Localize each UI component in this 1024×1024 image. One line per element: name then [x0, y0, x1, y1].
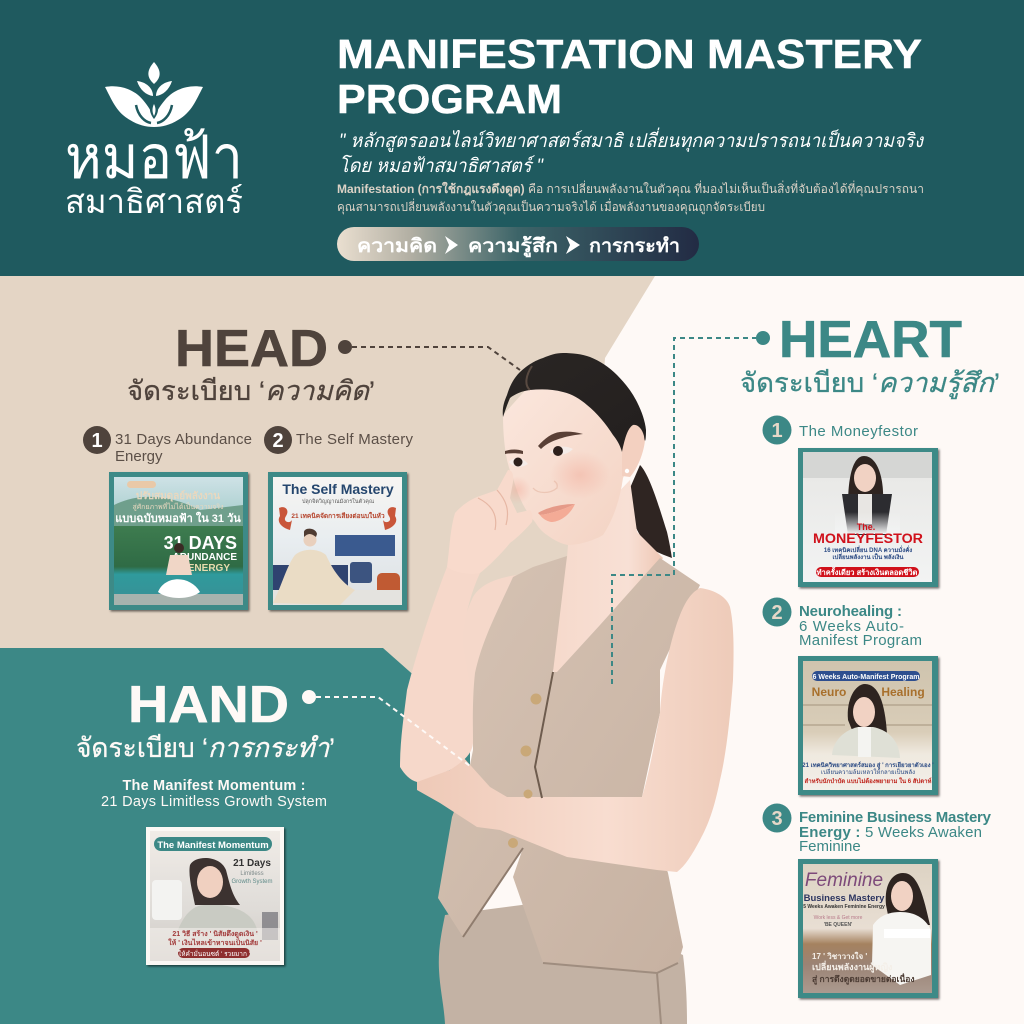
thumbnail: The Moneyfestor: The.	[857, 522, 875, 532]
thumbnail: The Moneyfestor: MONEYFESTOR	[813, 531, 923, 546]
thumbnail: Feminine Business Mastery: 'BE QUEEN'	[824, 922, 852, 928]
subheading: จัดระเบียบ ‘ความรู้สึก’	[740, 368, 1000, 400]
thumbnail: The Manifest Momentum: 21 Days	[233, 858, 271, 869]
item 1 label	[115, 431, 252, 465]
vest flap seam	[463, 848, 523, 937]
item 1 label: 31 Days Abundance	[115, 431, 252, 448]
item 3 label	[799, 809, 992, 855]
hair part	[526, 366, 532, 390]
ear	[622, 425, 645, 477]
item 2 number	[264, 426, 292, 454]
thumbnail: The Moneyfestor: 16 เทคนิคเปลี่ยน DNA ความมั่งคั่ง	[824, 545, 912, 554]
thumbnail: Feminine Business Mastery: 17 ' วิชาวางใจ '	[812, 951, 867, 961]
item 1 label: The Moneyfestor	[799, 423, 918, 440]
eyebrows	[505, 432, 583, 454]
left upper arm	[459, 575, 520, 760]
header band	[0, 0, 1024, 276]
vest placket	[535, 672, 553, 798]
title	[337, 31, 922, 122]
thumbnail: 31 Days Abundance Energy: สู่ศักยภาพที่ไม่ได้เป็นความจริง	[132, 502, 224, 511]
connector: HEAD	[338, 340, 520, 370]
ponytail	[629, 465, 672, 558]
panel: HAND	[76, 676, 470, 965]
item 2 label	[799, 603, 922, 649]
program name: The Manifest Momentum :	[122, 778, 306, 794]
thumbnail: Feminine Business Mastery: Business Mastery	[804, 893, 885, 904]
logo sub wordmark: สมาธิศาสตร์	[65, 183, 243, 220]
item 3 label: Energy : 5 Weeks Awaken	[799, 824, 982, 841]
thumbnail: 31 Days Abundance Energy: ปรับสมดุลย์พลังงาน	[136, 490, 220, 502]
eyes	[509, 446, 573, 467]
thumbnail: Neurohealing: เปลี่ยนความล้มเหลวให้กลายเป็นพลัง	[821, 767, 915, 776]
thumbnail: 31 Days Abundance Energy: ABUNDANCE	[173, 552, 237, 563]
thumbnail: Feminine Business Mastery: 5 Weeks Awaken Feminine Energy	[803, 904, 885, 910]
title: PROGRAM	[337, 76, 562, 122]
thumbnail: The Manifest Momentum: Limitless	[240, 871, 264, 877]
connector: HEART	[612, 331, 770, 685]
buttons	[508, 694, 542, 848]
item 1 label: Energy	[115, 448, 163, 465]
thumbnail: The Manifest Momentum: Growth System	[231, 879, 273, 885]
description: Manifestation (การใช้กฎแรงดึงดูด) คือ การเปลี่ยนพลังงานในตัวคุณ ที่มองไม่เห็นเป็นสิ่งที่จับต้องได้ที่คุณปรารถนา	[337, 180, 924, 197]
program name	[101, 778, 327, 810]
face	[503, 385, 640, 545]
panel: HEAD	[83, 320, 520, 610]
heading: HEAD: HEAD	[175, 320, 328, 378]
title: MANIFESTATION MASTERY	[337, 31, 922, 77]
thumbnail: The Self Mastery: ปลุกจิตวิญญาณมังกรในตัวคุณ	[302, 498, 374, 505]
heading: HAND: HAND	[128, 676, 289, 734]
connector: HAND	[302, 690, 470, 766]
logo: หมอฟ้า สมาธิศาสตร์	[65, 62, 243, 220]
left forearm	[400, 567, 480, 782]
thumbnail: Feminine Business Mastery	[798, 859, 938, 998]
thumbnail: The Manifest Momentum: ให้คำมั่นอนซต์ ' รวยมาก '	[178, 949, 250, 958]
subtitle quote: " หลักสูตรออนไลน์วิทยาศาสตร์สมาธิ เปลี่ยนทุกความปรารถนาเป็นความจริง	[339, 127, 925, 152]
neck and chest	[548, 480, 663, 680]
thumbnail: Neurohealing: 21 เทคนิควิทยาศาสตร์สมอง สู่ ' การเยียวยาตัวเอง '	[802, 761, 934, 770]
thumbnail: Neurohealing: สำหรับนักบำบัด แบบไม่ต้องพยายาม ใน 6 สัปดาห์	[805, 777, 932, 785]
thumbnail: 31 Days Abundance Energy: แบบฉบับหมอฟ้า ใน 31 วัน	[115, 511, 241, 525]
thumbnail: The Manifest Momentum: 21 วิธี สร้าง ' นิสัยดึงดูดเงิน '	[172, 929, 258, 939]
thumbnail: The Moneyfestor	[798, 448, 938, 587]
thumbnail: The Moneyfestor: เปลี่ยนพลังงาน เป็น พลังเงิน	[832, 552, 904, 561]
description: คุณสามารถเปลี่ยนพลังงานในตัวคุณเป็นความจริงได้ เมื่อพลังงานของคุณถูกจัดระเบียบ	[337, 198, 765, 215]
trousers	[439, 900, 687, 1024]
thumbnail: Neurohealing: Neuro	[812, 685, 846, 699]
right arm	[417, 588, 734, 872]
subheading: จัดระเบียบ ‘การกระทำ’	[76, 733, 335, 763]
thumbnail: Feminine Business Mastery: สู่ การดึงดูดยอดขายต่อเนื่อง	[812, 972, 915, 985]
thumbnail: 31 Days Abundance Energy: ENERGY	[188, 563, 230, 574]
thumbnail: The Self Mastery: The Self Mastery	[282, 481, 394, 497]
item 3 number	[762, 804, 792, 832]
description	[337, 180, 924, 215]
item 1 number: 1	[91, 430, 103, 452]
thumbnail: The Moneyfestor: ทำครั้งเดียว สร้างเงินตลอดชีวิต	[817, 566, 918, 577]
nose shadow	[533, 481, 557, 492]
pill: thought feeling action: การกระทำ	[589, 236, 680, 257]
item 3 number: 3	[771, 808, 783, 830]
thumbnail: The Manifest Momentum: The Manifest Momentum	[157, 840, 269, 851]
earring	[625, 469, 629, 473]
item 2 number: 2	[272, 430, 284, 452]
pill: thought feeling action: ความคิด	[357, 236, 437, 257]
item 3 label: Feminine Business Mastery	[799, 809, 992, 826]
pill: thought feeling action: ความรู้สึก	[468, 235, 558, 258]
background: tan HEAD panel	[0, 276, 655, 700]
thumbnail: Neurohealing	[798, 656, 938, 795]
item 3 label: Feminine	[799, 838, 861, 855]
item 2 label: The Self Mastery	[296, 431, 414, 448]
item 2 label: 6 Weeks Auto-	[799, 618, 904, 635]
thumbnail: The Manifest Momentum	[146, 827, 284, 965]
subtitle quote: โดย หมอฟ้าสมาธิศาสตร์ "	[339, 154, 544, 177]
item 2 label: Manifest Program	[799, 632, 922, 649]
item 1 number	[83, 426, 111, 454]
item 2 number: 2	[771, 602, 783, 624]
logo wordmark: หมอฟ้า	[65, 124, 243, 191]
thumbnail: 31 Days Abundance Energy	[109, 472, 248, 610]
item 2 label: Neurohealing :	[799, 603, 902, 620]
cheek blush	[503, 451, 610, 504]
item 1 number	[762, 416, 792, 444]
subtitle quote	[339, 127, 925, 177]
icon: lotus leaves	[105, 62, 203, 127]
thumbnail: The Self Mastery	[268, 472, 407, 610]
thumbnail: Neurohealing: 6 Weeks Auto-Manifest Program	[813, 674, 919, 681]
panel: HEART	[612, 311, 1000, 998]
thumbnail: The Manifest Momentum: ให้ ' เงินไหลเข้าหาจนเป็นนิสัย '	[168, 938, 262, 947]
vest	[438, 556, 700, 973]
thumbnail: Feminine Business Mastery: Work less & Get more	[814, 915, 863, 921]
heading: HEART: HEART	[779, 311, 962, 369]
vest hem	[543, 963, 678, 1024]
woman figure	[400, 353, 734, 1024]
hair top	[503, 353, 646, 452]
lips	[538, 504, 575, 522]
subheading: จัดระเบียบ ‘ความคิด’	[127, 376, 375, 406]
finger lines	[478, 490, 508, 530]
thumbnail: Neurohealing: Healing	[881, 685, 925, 699]
hand at temple	[447, 470, 533, 574]
thumbnail: Feminine Business Mastery: เปลี่ยนพลังงานผู้หญิง	[812, 960, 892, 973]
program name: 21 Days Limitless Growth System	[101, 794, 327, 810]
item 1 number: 1	[771, 420, 783, 442]
panel: HAND teal background	[0, 648, 470, 1024]
item 2 number	[762, 598, 792, 626]
thumbnail: 31 Days Abundance Energy: 31 DAYS	[164, 533, 237, 553]
thumbnail: Feminine Business Mastery: Feminine	[805, 870, 883, 891]
thumbnail: The Self Mastery: 21 เทคนิคจัดการเสียงต่อนบในหัว	[291, 511, 385, 520]
pill: thought feeling action	[337, 227, 699, 261]
